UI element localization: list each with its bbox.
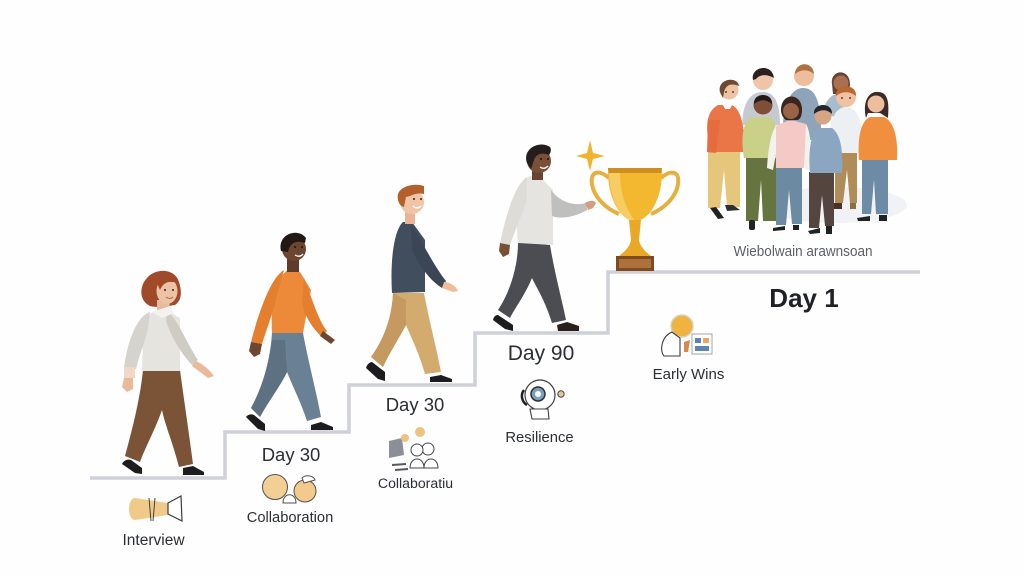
label: Day 90: Day 90 xyxy=(508,342,574,365)
back row person three xyxy=(823,72,850,118)
person in green jumper xyxy=(742,95,777,230)
icon: interview megaphone xyxy=(129,496,182,521)
team group xyxy=(707,64,907,234)
label: Early Wins: Early Wins xyxy=(653,366,724,383)
icon: collaboration faces xyxy=(262,474,316,503)
person in orange jumper right xyxy=(857,92,897,221)
icon: sparkle star xyxy=(576,140,605,171)
heading: Day 1: Day 1 xyxy=(769,283,839,313)
staircase line xyxy=(90,272,920,478)
person in pink top xyxy=(767,96,811,231)
person in orange jumper left xyxy=(707,80,744,219)
label: Collaboratiu: Collaboratiu xyxy=(378,475,453,491)
icon: resilience head with gear xyxy=(522,380,564,419)
person: day 30 step one xyxy=(246,233,335,431)
label: Interview: Interview xyxy=(122,532,185,549)
back row person one xyxy=(742,68,780,125)
ground shadow xyxy=(763,187,907,223)
person in white shirt xyxy=(829,86,863,209)
person in blue cardigan xyxy=(808,105,842,234)
person: interview step xyxy=(122,271,214,475)
scrambled group caption: Wiebolwain arawnsoan xyxy=(734,244,872,260)
person: day 90 step xyxy=(493,144,596,331)
label: Resilience: Resilience xyxy=(505,430,574,446)
label: Day 30 second: Day 30 xyxy=(386,394,444,415)
trophy xyxy=(576,140,678,271)
back row person two xyxy=(783,64,821,140)
label: Collaboration: Collaboration xyxy=(247,510,333,526)
icon: collaboration team xyxy=(389,427,438,470)
label: Day 30 first: Day 30 xyxy=(262,444,320,465)
person: day 30 step two xyxy=(366,185,458,382)
icon: early wins chart and medal xyxy=(662,315,712,356)
